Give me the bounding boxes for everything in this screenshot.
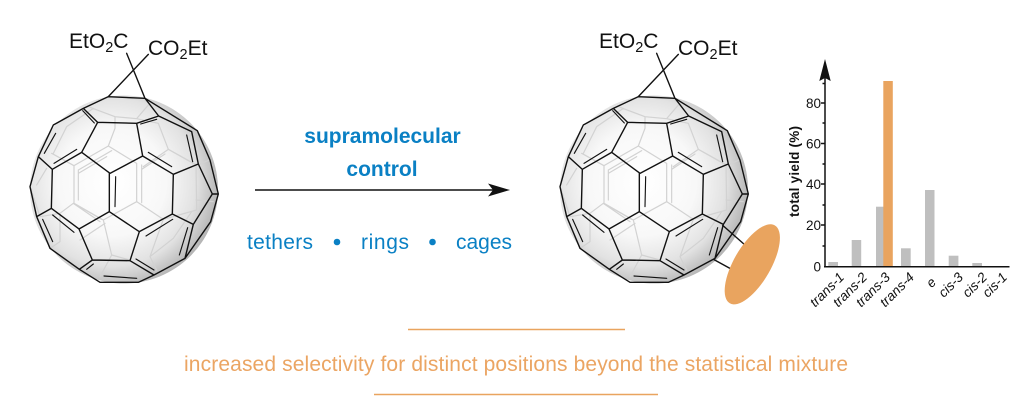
label: CO2Et right: Et	[718, 37, 738, 60]
x category labels: trans-2	[830, 269, 870, 310]
y tick labels: 80	[806, 96, 821, 111]
x category labels: trans-4	[877, 270, 917, 310]
y tick labels: 60	[806, 136, 821, 152]
bottom orange rule	[374, 394, 658, 396]
x category labels: e	[923, 275, 939, 290]
top orange rule	[408, 328, 625, 330]
fullerene right with tethered ring	[560, 30, 791, 313]
x category labels: cis-3	[935, 269, 966, 300]
label: EtO2C left: EtO	[69, 30, 105, 53]
orange ellipse	[714, 216, 791, 313]
y tick labels: 20	[806, 218, 821, 233]
text: tethers rings cages: rings	[361, 231, 409, 254]
label: CO2Et right: CO	[678, 37, 710, 60]
label: EtO2C right: C	[643, 30, 658, 53]
heading: supramolecular control: control	[346, 158, 418, 181]
bars	[828, 81, 982, 266]
label: CO2Et right: 2	[710, 47, 718, 63]
label: EtO2C left: C	[113, 30, 128, 53]
y tick labels: 0	[813, 260, 821, 274]
text: tethers rings cages: cages	[456, 231, 512, 254]
x category labels: cis-2	[959, 269, 990, 300]
label: EtO2C right: 2	[635, 40, 643, 56]
label: CO2Et left: Et	[188, 37, 208, 60]
heading: supramolecular control: supramolecular	[304, 125, 461, 148]
label: EtO2C left: 2	[105, 40, 113, 56]
x category labels	[807, 269, 1010, 310]
text: tethers rings cages	[247, 231, 512, 254]
arrow: reaction	[255, 184, 510, 196]
label: CO2Et left: CO	[148, 37, 180, 60]
tether bonds	[713, 225, 745, 270]
y axis title: total yield (%)	[787, 126, 802, 217]
x category labels: trans-3	[853, 269, 893, 310]
axes	[821, 74, 1010, 267]
caption: increased selectivity for distinct positions beyond the statistical mixture	[184, 353, 848, 376]
label: EtO2C right: EtO	[599, 30, 635, 53]
bar chart: total yield	[787, 59, 1010, 310]
label: CO2Et left: 2	[180, 47, 188, 63]
heading: supramolecular control	[304, 125, 461, 181]
axis arrow	[819, 59, 831, 81]
x category labels: trans-1	[807, 270, 847, 310]
y tick labels: 40	[806, 177, 821, 192]
x category labels: cis-1	[979, 270, 1010, 300]
y tick labels	[806, 96, 821, 274]
text: tethers rings cages: tethers	[247, 231, 313, 254]
fullerene left	[30, 30, 218, 284]
